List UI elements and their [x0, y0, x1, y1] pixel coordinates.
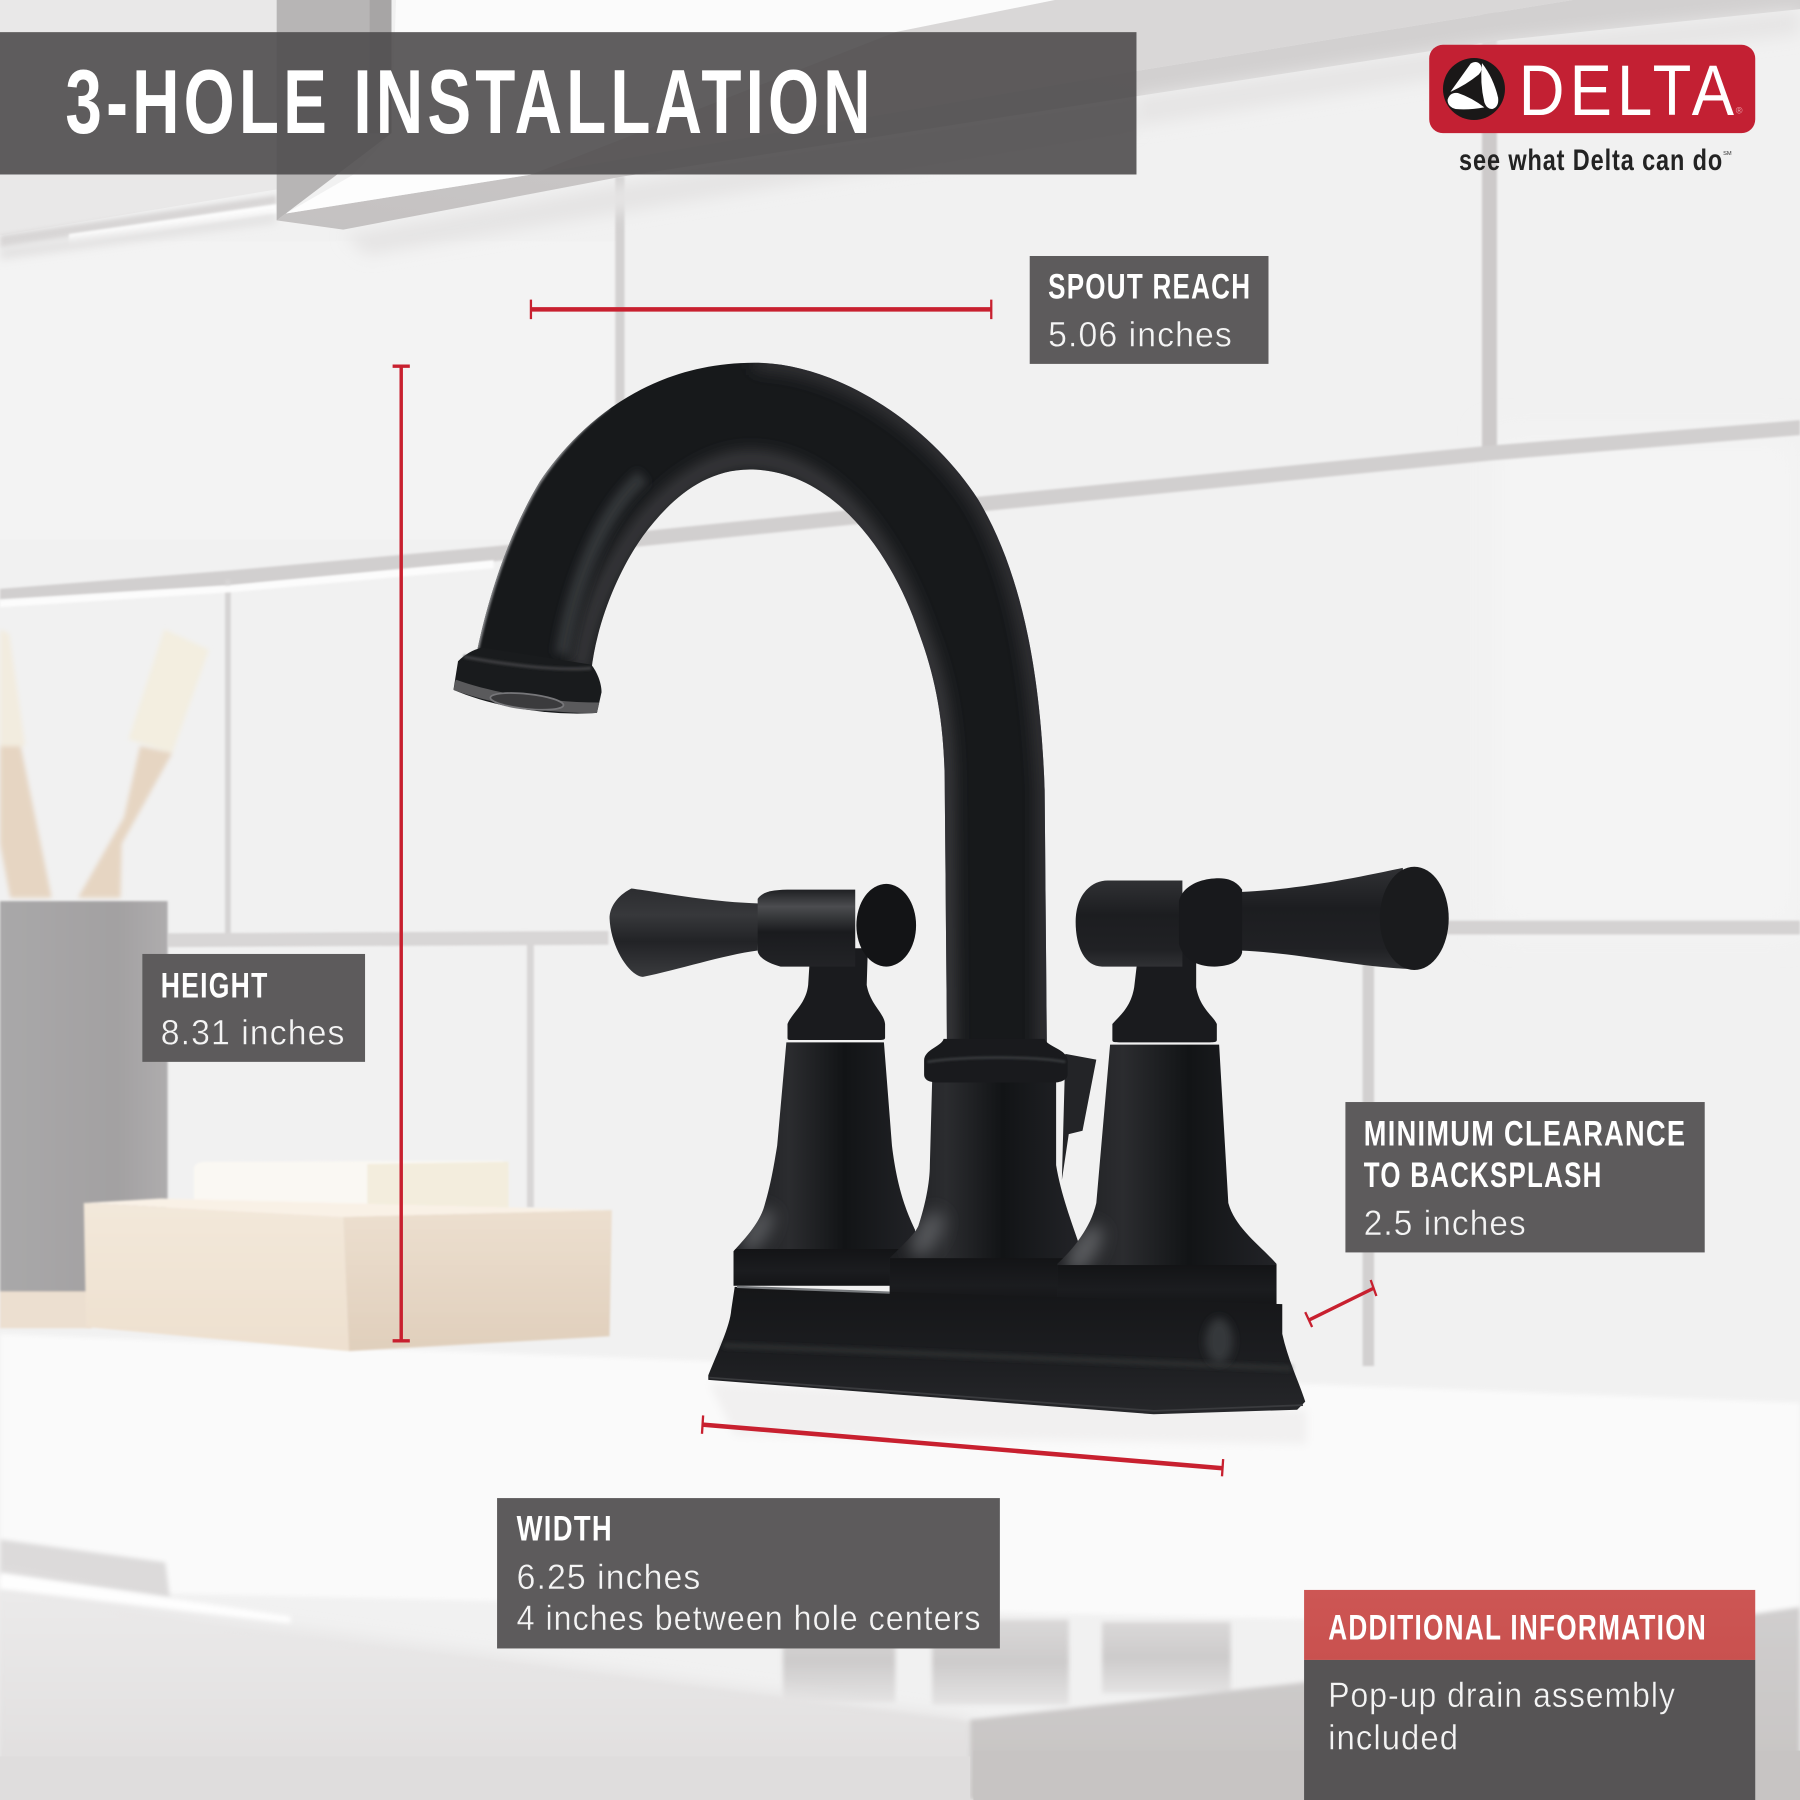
- left handle: [610, 884, 918, 1286]
- toothbrushes: [0, 629, 209, 898]
- panel text line one: Pop-up drain assembly: [1328, 1675, 1676, 1715]
- title banner: [0, 32, 1136, 174]
- callout value: 8.31 inches: [161, 1013, 346, 1053]
- bottom reflections: [783, 1620, 1231, 1705]
- callout: height: [142, 954, 365, 1062]
- callout heading: HEIGHT: [161, 966, 269, 1006]
- centre column base: [890, 1039, 1079, 1304]
- title: 3-HOLE INSTALLATION: [65, 52, 875, 153]
- dimension line: minimum clearance: [1305, 1280, 1376, 1327]
- callout heading: WIDTH: [517, 1509, 613, 1549]
- logo mark: [1443, 58, 1505, 120]
- tagline: see what Delta can do: [1459, 144, 1723, 177]
- shelf above the wall: [277, 0, 1800, 255]
- callout value: 6.25 inches: [517, 1557, 701, 1597]
- callout: minimum clearance to backsplash: [1345, 1102, 1705, 1252]
- deck plate: [708, 1287, 1305, 1414]
- dimension line: height: [393, 366, 410, 1341]
- cup: [0, 901, 168, 1328]
- dimension line: spout reach: [530, 300, 992, 319]
- right handle: [1057, 867, 1449, 1306]
- callout heading: SPOUT REACH: [1048, 266, 1251, 306]
- service mark: SM: [1723, 151, 1732, 157]
- dimension line: width: [702, 1415, 1223, 1476]
- panel: additional information: [1304, 1590, 1755, 1800]
- callout heading second line: TO BACKSPLASH: [1364, 1155, 1603, 1195]
- callout value: 5.06 inches: [1048, 315, 1233, 355]
- logo wordmark: DELTA: [1519, 52, 1739, 131]
- panel text line two: included: [1328, 1717, 1459, 1757]
- Delta logo: [1429, 45, 1755, 177]
- callout: width: [497, 1498, 1000, 1648]
- faucet spout: [453, 363, 1047, 1062]
- callout value: 2.5 inches: [1364, 1203, 1527, 1243]
- callout note: 4 inches between hole centers: [517, 1598, 982, 1638]
- soap dish with soap: [84, 1161, 612, 1351]
- callout heading: MINIMUM CLEARANCE: [1364, 1114, 1686, 1154]
- registered mark: ®: [1736, 106, 1743, 116]
- callout: spout reach: [1030, 256, 1268, 364]
- faucet: [453, 363, 1449, 1414]
- pop-up lever: [1062, 1054, 1096, 1180]
